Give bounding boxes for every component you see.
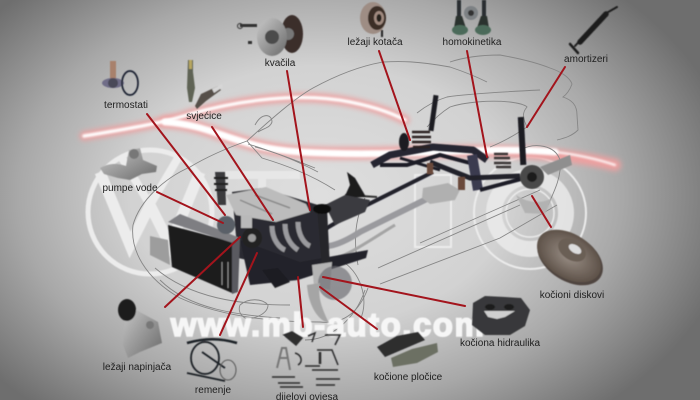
icon: brake pads (377, 332, 438, 367)
icon: brake caliper (472, 296, 530, 335)
rear frame (372, 147, 487, 165)
manifold runners (272, 222, 310, 250)
shocks (429, 95, 438, 131)
leader: amortizeri (527, 67, 565, 127)
car outline (133, 55, 578, 340)
icon: water pump (100, 148, 157, 180)
leader: svjećice (212, 127, 273, 220)
springs (412, 132, 511, 167)
leader: kvačila (287, 71, 310, 210)
wheel and caliper (312, 262, 332, 290)
watermark: circular logo and letters (88, 150, 586, 274)
rear suspension and drivetrain (305, 95, 572, 260)
icon: tensioner bearing (118, 299, 162, 358)
exhaust (305, 195, 435, 247)
icon: thermostat (102, 61, 138, 95)
gearbox mount (344, 172, 366, 198)
leader: homokinetika (467, 51, 487, 157)
leader: dijelovi ovjesa (298, 277, 303, 327)
label: ležaji kotača: ležaji kotača (347, 37, 403, 48)
leader: kočiona hidraulika (323, 277, 465, 306)
label: kvačila: kvačila (265, 58, 296, 69)
label: termostati: termostati (104, 100, 148, 111)
icon: spark plugs (187, 60, 223, 109)
leader: remenje (220, 253, 257, 335)
rear hub (520, 165, 544, 189)
icon: suspension parts (272, 332, 340, 387)
engine and radiator (150, 172, 368, 323)
icon: wheel bearing (360, 2, 386, 37)
leader: ležaji napinjača (165, 237, 240, 307)
label: homokinetika: homokinetika (443, 37, 502, 48)
label: kočione pločice: kočione pločice (374, 372, 443, 383)
leader: pumpe vode (157, 192, 223, 223)
leader: ležaji kotača (379, 51, 410, 140)
leader: kočioni diskovi (532, 196, 551, 227)
icon: CV joints (452, 0, 491, 35)
pink swoosh (84, 98, 615, 165)
label: remenje: remenje (195, 385, 231, 396)
front strut right (317, 208, 330, 268)
label: kočioni diskovi: kočioni diskovi (540, 290, 604, 301)
left fog panel (150, 236, 170, 265)
label: amortizeri: amortizeri (564, 54, 608, 65)
icon: shock absorber (570, 7, 617, 53)
icon: brake disc (527, 219, 613, 297)
driveshaft (320, 172, 433, 232)
red leader lines (147, 51, 565, 335)
brackets (427, 163, 433, 174)
text: url watermark: www.mb-auto.com (170, 306, 485, 343)
leader: termostati (147, 114, 225, 215)
label: svjećice: svjećice (186, 111, 222, 122)
front strut left (215, 172, 226, 205)
label: ležaji napinjača: ležaji napinjača (103, 362, 172, 373)
label: kočiona hidraulika: kočiona hidraulika (460, 338, 540, 349)
radiator (168, 225, 233, 293)
icon: belts (187, 339, 237, 381)
leader: kočione pločice (320, 287, 377, 329)
label: pumpe vode: pumpe vode (102, 183, 158, 194)
icon: clutch (238, 15, 303, 56)
